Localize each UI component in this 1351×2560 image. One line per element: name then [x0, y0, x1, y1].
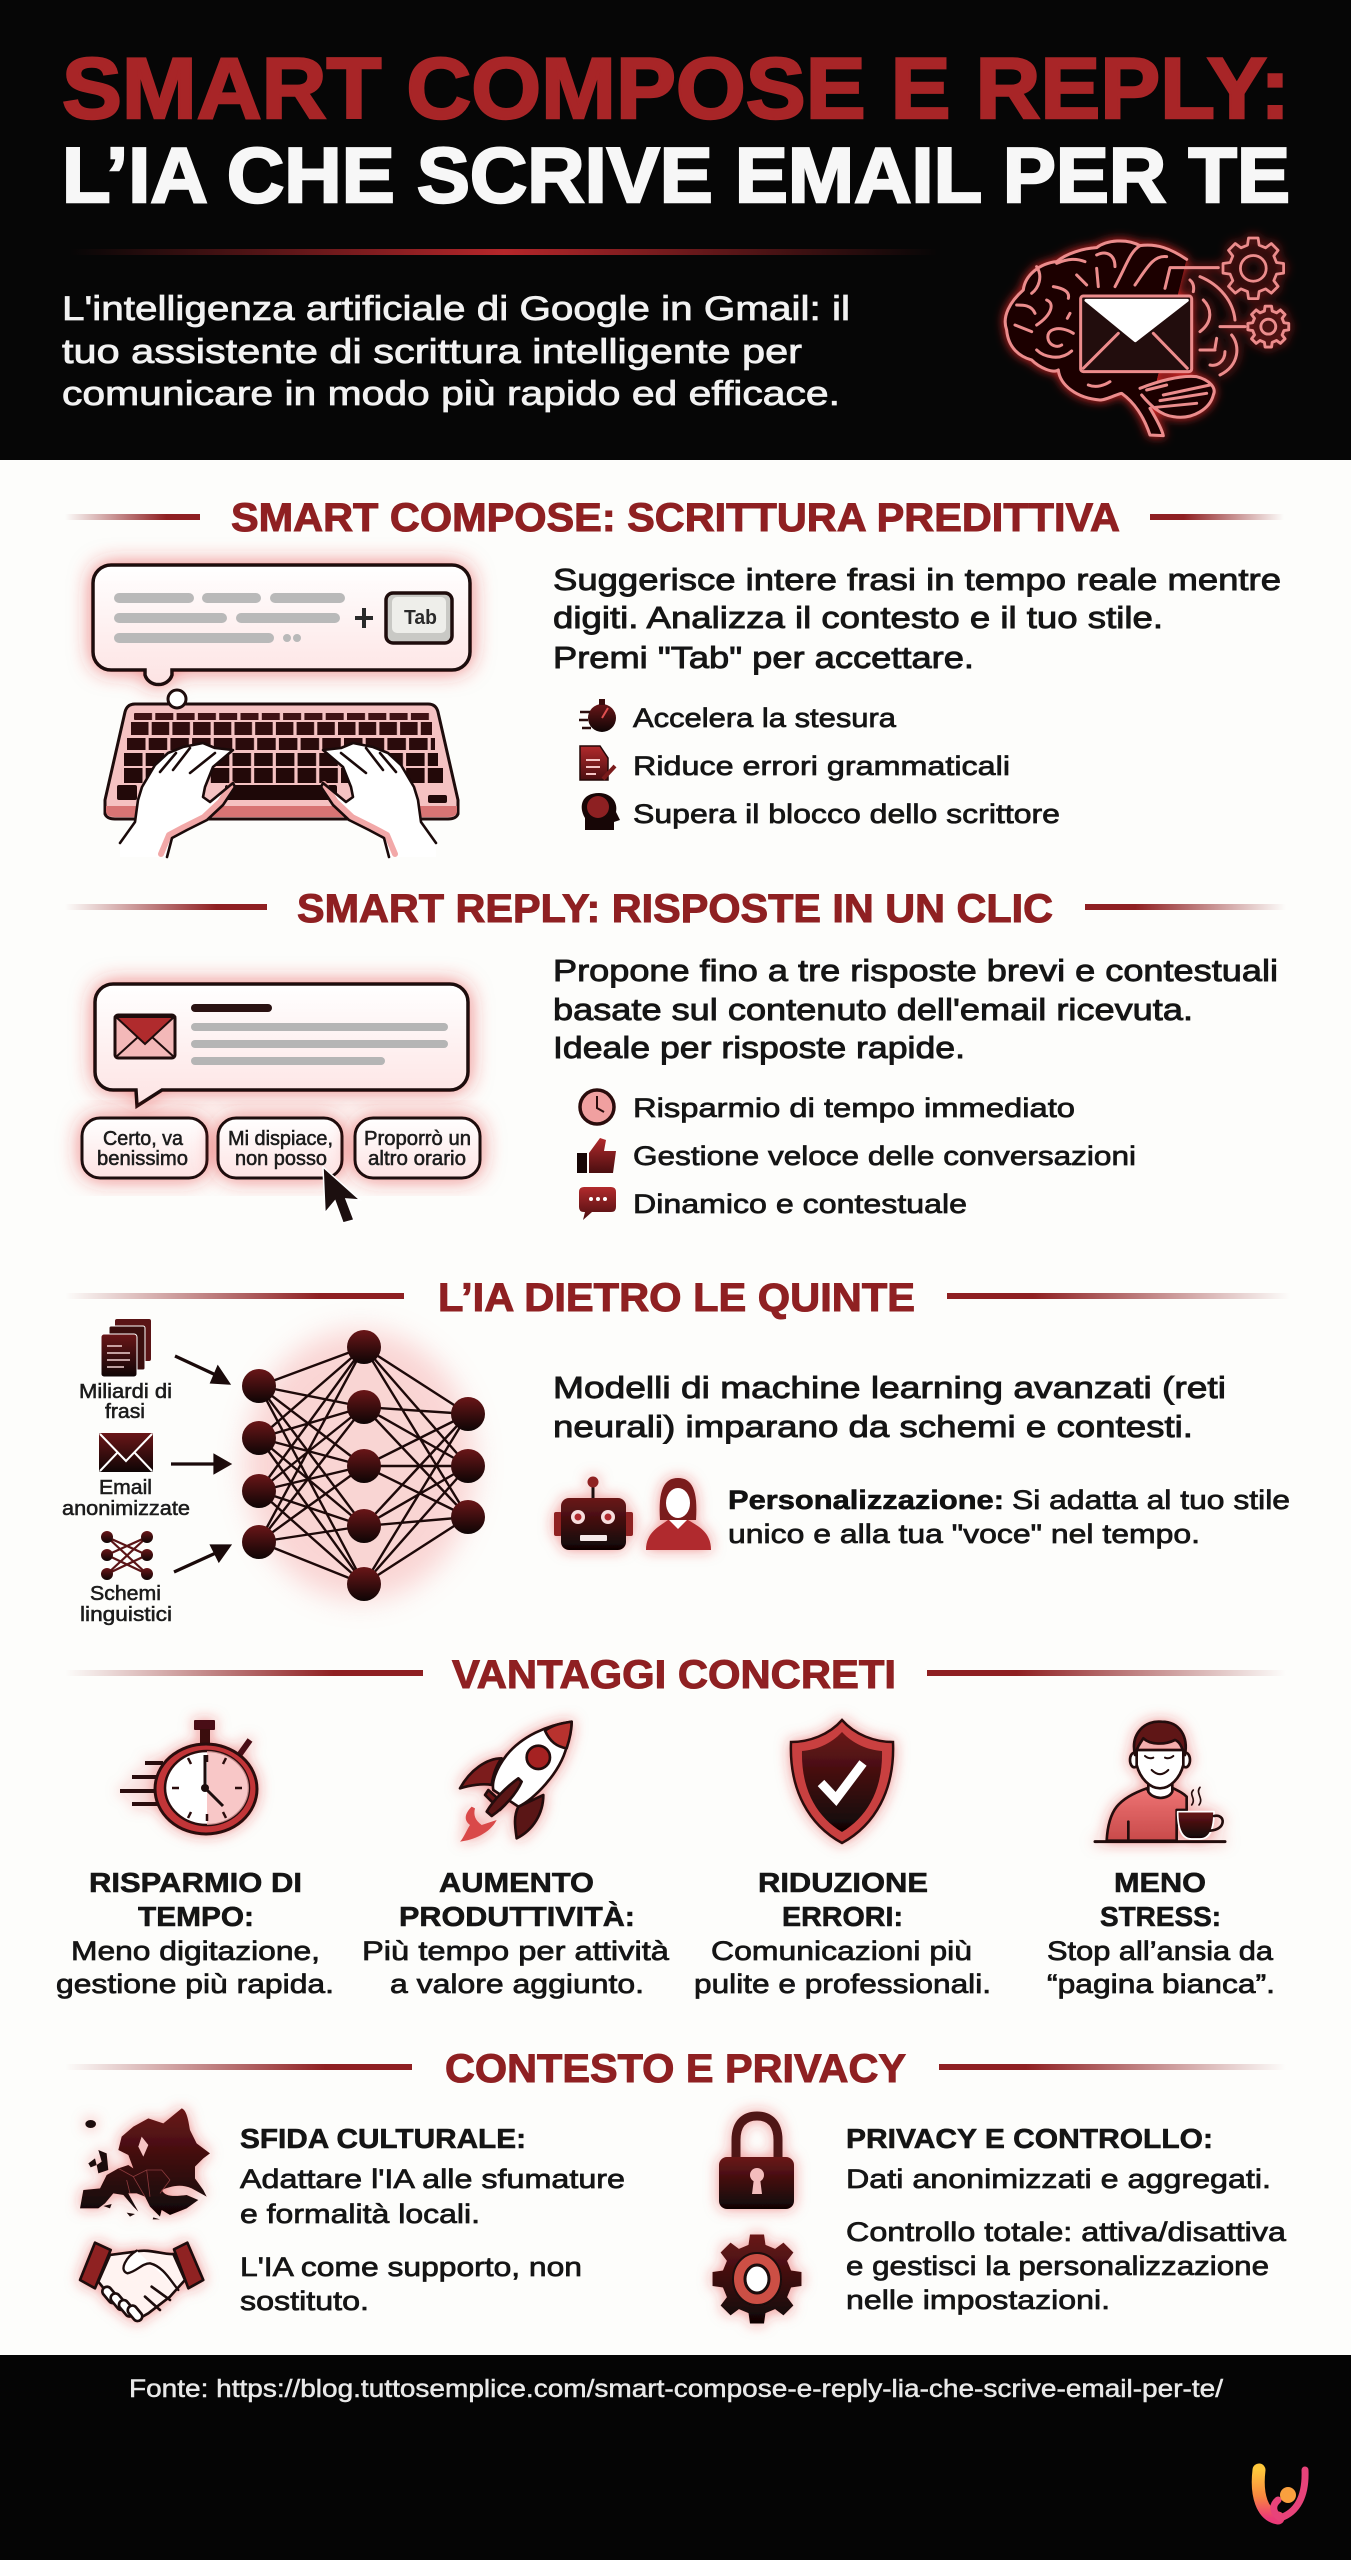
- culture text: sostituto.: [240, 2286, 369, 2316]
- heading: smart reply: SMART REPLY: RISPOSTE IN UN CLIC: [297, 887, 1053, 931]
- input: schemi linguistici: [80, 1531, 172, 1626]
- body text: smart compose: [553, 562, 1281, 675]
- culture text: L'IA come supporto, non: [240, 2252, 582, 2282]
- advantage 4 text: [1047, 1867, 1275, 1999]
- advantage 4 text: MENO: [1114, 1867, 1206, 1898]
- body text: smart reply: Propone fino a tre risposte brevi e contestuali: [553, 953, 1278, 988]
- footer panel: [0, 2355, 1351, 2560]
- icon: glowing brain with envelope and gears: [1005, 238, 1289, 436]
- personalisation text: [728, 1485, 1290, 1549]
- bullet: risparmio di tempo: Risparmio di tempo immediato: [633, 1093, 1075, 1123]
- advantage 1 text: Meno digitazione,: [71, 1936, 320, 1966]
- bullet: gestione veloce: [577, 1138, 1136, 1173]
- advantage 2 text: Più tempo per attività: [362, 1936, 670, 1966]
- input: schemi linguistici: Schemi: [90, 1583, 161, 1605]
- logo: [1258, 2470, 1305, 2518]
- advantage 3 text: pulite e professionali.: [694, 1969, 991, 1999]
- heading: smart reply: [65, 887, 1286, 931]
- advantage 3 text: ERRORI:: [782, 1901, 903, 1932]
- section: context and privacy: [65, 2047, 1287, 2323]
- advantage 1 text: TEMPO:: [138, 1901, 254, 1932]
- intro text: [62, 290, 850, 413]
- advantage 3 text: RIDUZIONE: [758, 1867, 928, 1898]
- arrows into network: [171, 1356, 229, 1572]
- bullet: risparmio di tempo: [580, 1090, 1075, 1124]
- input: miliardi di frasi: frasi: [105, 1401, 145, 1423]
- bullet: supera il blocco: [582, 793, 1060, 830]
- personalisation text: unico e alla tua "voce" nel tempo.: [728, 1519, 1200, 1549]
- input: schemi linguistici: linguistici: [80, 1604, 172, 1626]
- advantage 2 text: [362, 1867, 670, 1999]
- advantage 2 text: PRODUTTIVITÀ:: [399, 1901, 635, 1932]
- bullet: dinamico e contestuale: [579, 1187, 967, 1220]
- input: email anonimizzate: [62, 1433, 190, 1520]
- body text: smart reply: Ideale per risposte rapide.: [553, 1030, 965, 1065]
- body text: machine learning: neurali) imparano da schemi e contesti.: [553, 1409, 1193, 1444]
- privacy text: Controllo totale: attiva/disattiva: [846, 2217, 1287, 2247]
- body text: machine learning: Modelli di machine learning avanzati (reti: [553, 1370, 1226, 1405]
- icon: envelope: [115, 1015, 175, 1058]
- section: concrete advantages: [56, 1653, 1286, 1999]
- icon: robot: [554, 1476, 633, 1550]
- heading: context and privacy: [65, 2047, 1286, 2091]
- personalisation text: Personalizzazione:: [728, 1485, 1004, 1515]
- privacy text: [846, 2123, 1287, 2315]
- culture text: Adattare l'IA alle sfumature: [240, 2164, 625, 2194]
- culture text: e formalità locali.: [240, 2199, 480, 2229]
- body text: smart compose: Premi "Tab" per accettare.: [553, 640, 974, 675]
- illustration: suggestion bubble: [93, 565, 470, 685]
- privacy text: Dati anonimizzati e aggregati.: [846, 2164, 1271, 2194]
- advantage 4 text: Stop all’ansia da: [1047, 1936, 1274, 1966]
- reply button 3: altro orario: [368, 1148, 466, 1170]
- illustration: received email bubble: [95, 984, 468, 1106]
- heading: ai behind the scenes: L’IA DIETRO LE QUINTE: [438, 1276, 915, 1320]
- bullet: dinamico e contestuale: Dinamico e contestuale: [633, 1189, 967, 1219]
- reply button 2: Mi dispiace,: [228, 1128, 333, 1150]
- privacy text: nelle impostazioni.: [846, 2285, 1110, 2315]
- icon: europe map: [80, 2108, 210, 2219]
- input: miliardi di frasi: [79, 1319, 172, 1423]
- section: smart compose: [65, 496, 1284, 857]
- heading: smart compose: SMART COMPOSE: SCRITTURA PREDITTIVA: [231, 496, 1120, 540]
- icon: shield with check: [791, 1720, 893, 1843]
- advantage 4 text: STRESS:: [1100, 1901, 1221, 1932]
- reply button 1: benissimo: [97, 1148, 188, 1170]
- source line: Fonte: https://blog.tuttosemplice.com/smart-compose-e-reply-lia-che-scrive-email-per-te/: [129, 2375, 1223, 2403]
- icon: tab key: Tab: [404, 607, 437, 629]
- body text: smart compose: digiti. Analizza il contesto e il tuo stile.: [553, 600, 1163, 635]
- icon: relaxed person with coffee: [1095, 1722, 1225, 1842]
- advantage 3 text: Comunicazioni più: [711, 1936, 972, 1966]
- reply button 2: non posso: [235, 1148, 327, 1170]
- icon: person: [646, 1478, 711, 1550]
- bullet: supera il blocco: Supera il blocco dello scrittore: [633, 799, 1060, 829]
- intro text: L'intelligenza artificiale di Google in Gmail: il: [62, 290, 850, 328]
- body text: smart reply: basate sul contenuto dell'email ricevuta.: [553, 992, 1193, 1027]
- input: email anonimizzate: Email: [99, 1477, 152, 1499]
- icon: stopwatch: [120, 1720, 257, 1834]
- bullet: riduce errori grammaticali: [580, 746, 1010, 781]
- icon: tab key: [386, 593, 452, 643]
- reply button 2: [218, 1118, 342, 1178]
- advantage 1 text: RISPARMIO DI: [89, 1867, 302, 1898]
- icon: rocket: [460, 1722, 572, 1842]
- heading: advantages: [65, 1653, 1286, 1697]
- advantage 2 text: a valore aggiunto.: [390, 1969, 644, 1999]
- reply button 3: Proporrò un: [364, 1128, 471, 1150]
- advantage 1 text: gestione più rapida.: [56, 1969, 334, 1999]
- input: miliardi di frasi: Miliardi di: [79, 1381, 172, 1403]
- personalisation text: Si adatta al tuo stile: [1012, 1485, 1290, 1515]
- reply button 1: Certo, va: [103, 1128, 184, 1150]
- heading: ai behind the scenes: [65, 1276, 1290, 1320]
- title line 1: SMART COMPOSE E REPLY:: [62, 41, 1290, 137]
- reply button 3: [355, 1118, 480, 1178]
- section: smart reply: [65, 887, 1286, 1223]
- privacy text: e gestisci la personalizzazione: [846, 2251, 1269, 2281]
- advantage 1 text: [56, 1867, 334, 1999]
- bullet: gestione veloce: Gestione veloce delle conversazioni: [633, 1141, 1136, 1171]
- icon: mouse cursor: [323, 1167, 360, 1223]
- body text: smart compose: Suggerisce intere frasi in tempo reale mentre: [553, 562, 1281, 597]
- advantage 2 text: AUMENTO: [439, 1867, 594, 1898]
- culture text: [240, 2123, 625, 2316]
- advantage 3 text: [694, 1867, 991, 1999]
- left hand: [120, 743, 235, 857]
- right hand: [321, 743, 436, 857]
- body text: smart reply: [553, 953, 1278, 1065]
- illustration: keyboard and hands: [105, 690, 458, 857]
- header divider: [70, 249, 938, 255]
- intro text: comunicare in modo più rapido ed efficace.: [62, 375, 840, 413]
- neural network diagram: [242, 1330, 485, 1601]
- icon: handshake: [80, 2243, 203, 2323]
- bullet: accelera la stesura: Accelera la stesura: [633, 703, 897, 733]
- input: email anonimizzate: anonimizzate: [62, 1498, 190, 1520]
- intro text: tuo assistente di scrittura intelligente per: [62, 333, 802, 371]
- heading: context and privacy: CONTESTO E PRIVACY: [445, 2047, 906, 2091]
- bullet: accelera la stesura: [579, 699, 897, 733]
- section: ai behind the scenes: [62, 1276, 1290, 1626]
- icon: padlock: [719, 2116, 794, 2209]
- icon: settings gear: [713, 2235, 801, 2323]
- heading: advantages: VANTAGGI CONCRETI: [452, 1653, 896, 1697]
- culture text: SFIDA CULTURALE:: [240, 2123, 526, 2154]
- bullet: riduce errori grammaticali: Riduce errori grammaticali: [633, 751, 1010, 781]
- privacy text: PRIVACY E CONTROLLO:: [846, 2123, 1213, 2154]
- header panel: [0, 0, 1351, 460]
- reply button 1: [82, 1118, 207, 1178]
- body text: machine learning: [553, 1370, 1226, 1444]
- title line 2: L’IA CHE SCRIVE EMAIL PER TE: [62, 131, 1290, 219]
- advantage 4 text: “pagina bianca”.: [1047, 1969, 1275, 1999]
